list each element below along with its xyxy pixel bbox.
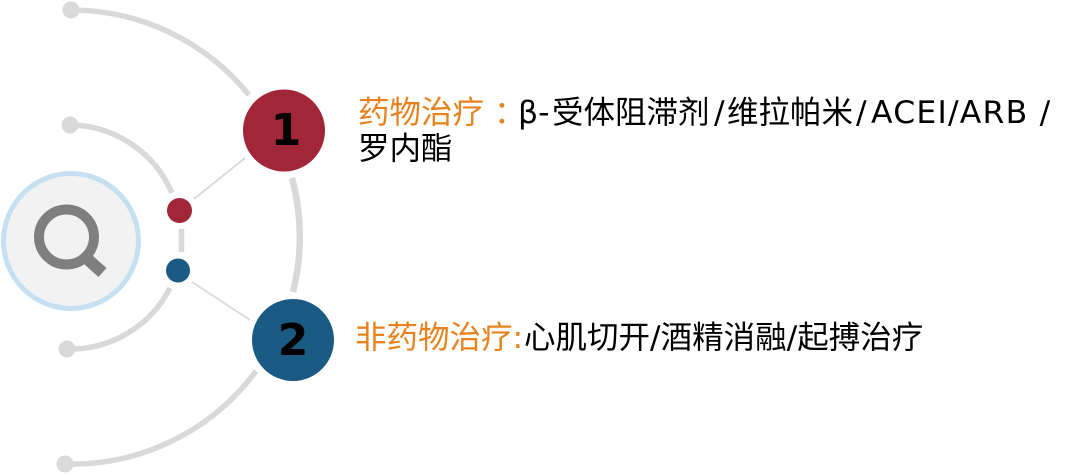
inner arc middle: [179, 229, 184, 252]
connector line to badge 2: [192, 282, 250, 320]
inner arc top with end dot: [62, 116, 172, 193]
outer arc top with end dot: [62, 2, 249, 95]
small blue dot: [166, 258, 190, 282]
text: drug therapy: β-: [518, 95, 549, 131]
text: drug therapy: ：: [494, 95, 526, 131]
text: non-drug therapy: 非药物治疗:: [355, 320, 523, 356]
badge 1: 1: [271, 105, 301, 156]
badge 1: [243, 90, 325, 172]
outer arc bottom with end dot: [56, 371, 256, 472]
text: drug therapy: [358, 95, 1051, 167]
small red dot: [167, 198, 192, 223]
text: drug therapy: 受体阻滞剂: [552, 95, 710, 131]
text: drug therapy: 维拉帕米: [727, 95, 853, 131]
text: drug therapy: /: [714, 95, 725, 131]
badge 2: 2: [278, 315, 308, 366]
badge 2: [252, 299, 334, 381]
outer arc middle: [292, 178, 300, 292]
text: drug therapy: 药物治疗: [358, 95, 484, 131]
magnifier circle icon: [4, 174, 138, 308]
text: drug therapy: 罗内酯: [358, 131, 453, 167]
text: drug therapy: /: [856, 95, 867, 131]
inner arc bottom with end dot: [58, 288, 170, 358]
connector line to badge 1: [194, 158, 245, 199]
text: non-drug therapy: 心肌切开/酒精消融/起搏治疗: [524, 320, 923, 356]
icon: magnifying glass: [39, 210, 102, 272]
text: drug therapy: ACEI/ARB /: [871, 95, 1051, 131]
